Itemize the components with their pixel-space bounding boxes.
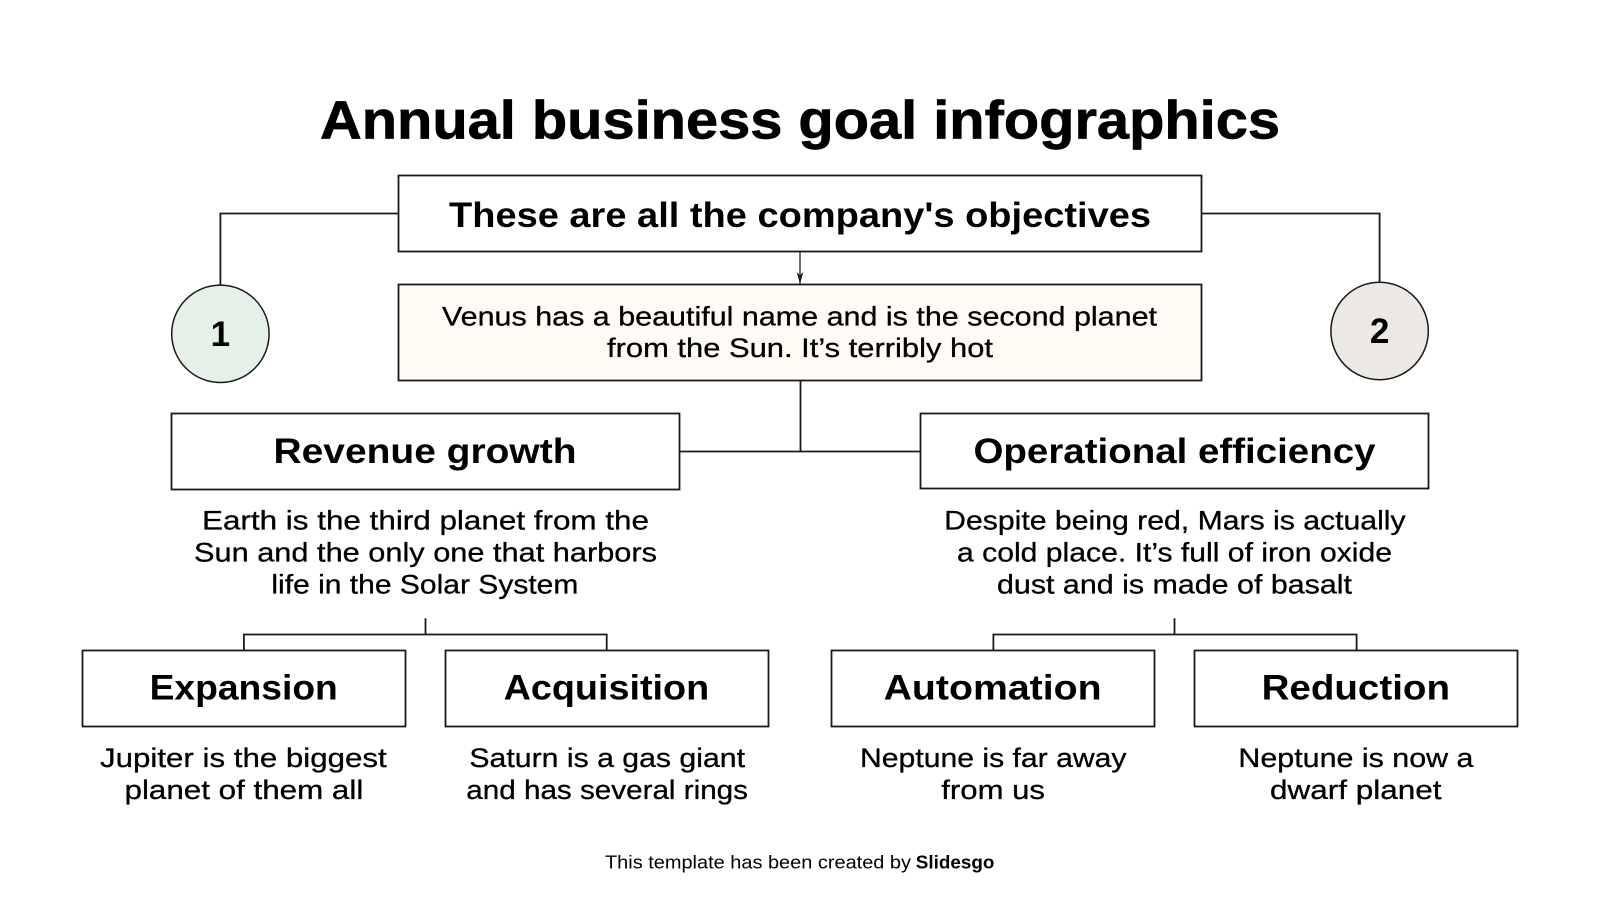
- panel: Expansion: [82, 650, 406, 726]
- text: Operational efficiency description: dust and is made of basalt: [997, 570, 1353, 600]
- text: Operational efficiency description: Despite being red, Mars is actually: [944, 506, 1406, 536]
- badge: number 1: 1: [211, 315, 230, 354]
- text: Revenue growth description: [194, 506, 657, 600]
- panel: Venus description: [398, 284, 1202, 380]
- arrow: objectives to description: [797, 252, 803, 284]
- panel: Revenue growth: [172, 414, 680, 490]
- connector: objectives to circle 1: [220, 214, 398, 286]
- panel: company objectives: These are all the company's objectives: [449, 196, 1151, 235]
- panel: Expansion: Expansion: [150, 669, 338, 708]
- text: Expansion description: planet of them all: [124, 775, 363, 805]
- footer credit: This template has been created by: [605, 852, 911, 872]
- text: Revenue growth description: life in the Solar System: [271, 570, 578, 600]
- text: Reduction description: Neptune is now a: [1238, 743, 1475, 773]
- title: Annual business goal infographics: [320, 90, 1280, 150]
- text: Operational efficiency description: a cold place. It’s full of iron oxide: [957, 538, 1392, 568]
- badge: number 2: [1331, 282, 1428, 380]
- text: Expansion description: [100, 743, 387, 805]
- text: Revenue growth description: Earth is the third planet from the: [202, 506, 649, 536]
- connector: objectives to circle 2: [1202, 214, 1380, 283]
- connector: description to both branches: [680, 380, 920, 452]
- text: Automation description: [860, 743, 1127, 805]
- panel: Venus description: from the Sun. It’s terribly hot: [607, 333, 994, 363]
- panel: Revenue growth: Revenue growth: [274, 432, 576, 471]
- panel: Acquisition: [446, 650, 768, 726]
- text: Acquisition description: [466, 743, 748, 805]
- text: Operational efficiency description: [944, 506, 1406, 600]
- panel: Acquisition: Acquisition: [504, 669, 709, 708]
- text: Automation description: from us: [941, 775, 1045, 805]
- panel: company objectives: [398, 176, 1202, 252]
- panel: Operational efficiency: Operational efficiency: [974, 432, 1376, 471]
- text: Automation description: Neptune is far away: [860, 743, 1127, 773]
- footer credit: Slidesgo: [916, 852, 994, 872]
- text: Acquisition description: and has several rings: [466, 775, 748, 805]
- connector: operational efficiency children: [993, 618, 1357, 650]
- text: Revenue growth description: Sun and the only one that harbors: [194, 538, 657, 568]
- badge: number 1: [172, 285, 269, 382]
- panel: Operational efficiency: [920, 414, 1428, 488]
- badge: number 2: 2: [1370, 312, 1389, 351]
- panel: Reduction: [1194, 650, 1518, 726]
- connector: revenue growth children: [244, 618, 607, 650]
- panel: Venus description: Venus has a beautiful name and is the second planet: [442, 301, 1158, 331]
- text: Acquisition description: Saturn is a gas giant: [469, 743, 746, 773]
- text: Expansion description: Jupiter is the biggest: [100, 743, 387, 773]
- panel: Automation: Automation: [884, 669, 1102, 708]
- panel: Reduction: Reduction: [1262, 669, 1450, 708]
- text: Reduction description: [1238, 743, 1475, 805]
- text: Reduction description: dwarf planet: [1270, 775, 1442, 805]
- panel: Automation: [832, 650, 1154, 726]
